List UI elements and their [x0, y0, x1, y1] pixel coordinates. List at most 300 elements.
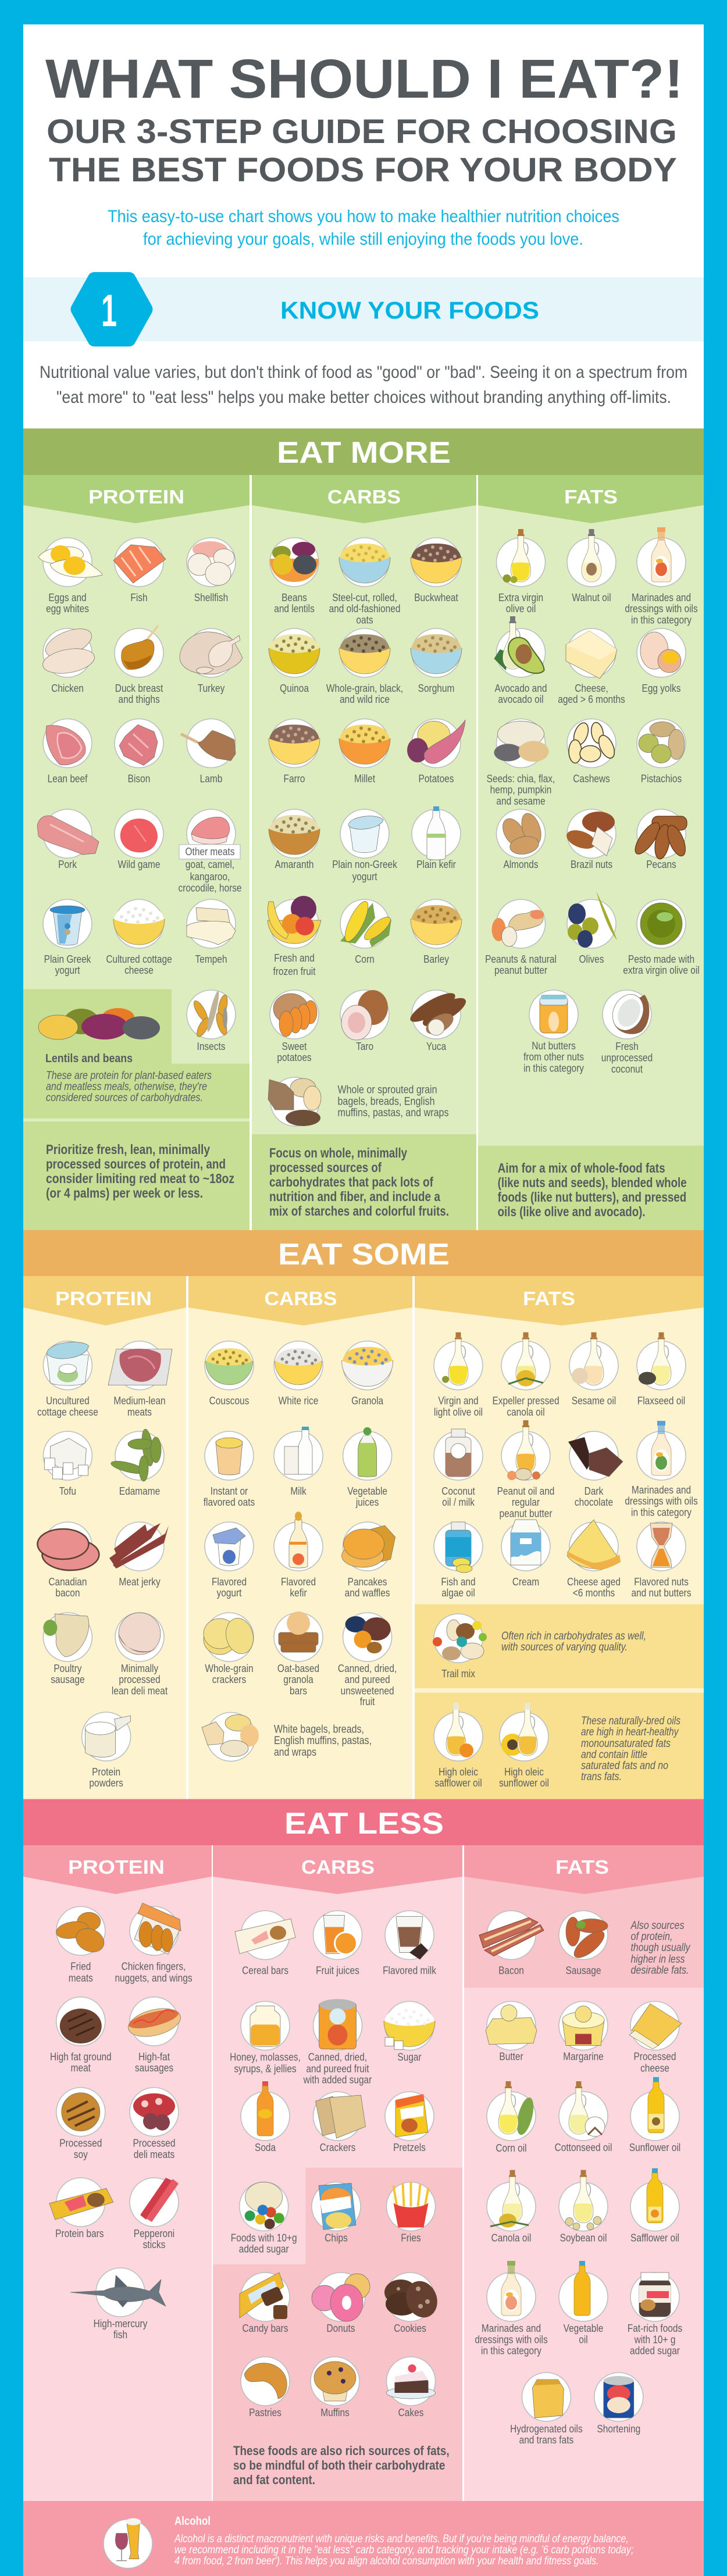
food: marinades	[475, 2261, 548, 2357]
food: high oleic sunflower oil: sunflower oil	[499, 1777, 549, 1789]
food: chicken	[41, 623, 97, 694]
food: turkey	[180, 628, 243, 694]
food: fat-rich foods	[628, 2273, 682, 2357]
food: lamb: Lamb	[200, 773, 222, 785]
food: canned fruit with sugar: Canned, dried,	[308, 2051, 367, 2063]
food: peanut oil: regular	[512, 1496, 540, 1509]
food: canned fruit with sugar: with added sugar	[303, 2074, 372, 2086]
icon: alcohol	[104, 2518, 152, 2568]
food: canned fruit with sugar	[303, 1999, 372, 2086]
food: sausage	[559, 1911, 608, 1977]
food: other meats: goat, camel,	[186, 859, 234, 870]
icon: step number hexagon: 1	[101, 285, 117, 336]
panel: alcohol	[23, 2501, 704, 2576]
food: plain greek yogurt: Plain Greek	[44, 953, 91, 965]
food: high oleic sunflower oil	[499, 1703, 549, 1789]
step description	[40, 363, 687, 407]
food: soda	[241, 2081, 290, 2153]
food: pancakes and waffles: Pancakes	[348, 1576, 387, 1588]
food: sunflower oil	[629, 2077, 680, 2153]
food: high fat ground meat: High fat ground	[50, 2051, 112, 2063]
food: canned fruit with sugar: and pureed fruit	[306, 2063, 369, 2075]
food: corn oil: Corn oil	[496, 2142, 527, 2154]
food: duck breast	[115, 626, 163, 706]
note: plant-based protein: and meatless meals, otherwise, they're	[46, 1081, 207, 1093]
food: lean beef: Lean beef	[48, 773, 88, 785]
food: pork: Pork	[58, 859, 77, 870]
panel: eat some fats	[415, 1276, 704, 1799]
food: white bagels: English muffins, pastas,	[274, 1735, 372, 1747]
food: pepperoni sticks: sticks	[143, 2239, 165, 2251]
note: protein advice	[23, 1121, 250, 1230]
note: protein advice: consider limiting red meat to ~18oz	[46, 1171, 234, 1186]
food: eggs	[38, 538, 102, 615]
header: protein	[23, 1845, 212, 1894]
panel: eat less carbs	[213, 1845, 462, 2502]
note: plant-based protein	[46, 1070, 212, 1104]
note: carbs rich in fats	[233, 2443, 450, 2487]
callout: other meats tag: Other meats	[185, 846, 235, 858]
food: flavored milk: Flavored milk	[383, 1964, 436, 1977]
food: vegetable juices	[343, 1427, 392, 1509]
food: marinades: dressings with oils	[625, 603, 698, 615]
food: instant oats: flavored oats	[204, 1496, 255, 1509]
food: crackers: Crackers	[320, 2142, 355, 2153]
food: oat-based granola bars	[274, 1612, 323, 1697]
food: crackers	[313, 2092, 365, 2153]
header: carbs	[213, 1845, 462, 1894]
food: chicken fingers: Chicken fingers,	[122, 1960, 186, 1973]
food: cashews: Cashews	[573, 773, 610, 785]
food: plain non-greek yogurt	[332, 809, 397, 883]
food: high-mercury fish	[70, 2268, 166, 2341]
food: trail mix: Trail mix	[441, 1668, 475, 1680]
food: pork	[37, 809, 99, 870]
food: pesto: extra virgin olive oil	[623, 964, 700, 977]
food: oat-based granola bars: granola	[283, 1674, 313, 1686]
header: carbs: CARBS	[264, 1288, 337, 1310]
food: fresh and frozen fruit: frozen fruit	[273, 966, 316, 977]
food: oats: and old-fashioned	[329, 603, 400, 615]
food: nut butters: from other nuts	[523, 1051, 584, 1063]
food: taro	[340, 990, 389, 1052]
food: white bagels	[202, 1713, 372, 1762]
food: amaranth	[269, 809, 320, 870]
header: fats	[464, 1845, 704, 1894]
food: high-fat sausages: High-fat	[138, 2051, 170, 2063]
food: chips	[312, 2182, 361, 2244]
food: pepperoni sticks	[130, 2178, 179, 2251]
food: high fat ground meat: meat	[71, 2062, 91, 2074]
food: whole-grain crackers: crackers	[212, 1674, 246, 1686]
food: processed cheese	[629, 2001, 682, 2074]
food: flaxseed oil: Flaxseed oil	[637, 1395, 685, 1407]
food: other meats: kangaroo,	[190, 871, 230, 883]
food: tofu	[43, 1431, 92, 1497]
food: vegetable oil	[559, 2261, 608, 2346]
food: sugar: Sugar	[397, 2051, 422, 2063]
food: peanuts: peanut butter	[494, 964, 547, 977]
food: vegetable juices: Vegetable	[347, 1485, 387, 1497]
note: trail mix	[501, 1630, 646, 1653]
note: carbs advice: mix of starches and colorful fruits.	[269, 1203, 449, 1219]
note: carbs advice: Focus on whole, minimally	[269, 1145, 407, 1160]
note: high oleic oils	[581, 1715, 680, 1783]
intro text: This easy-to-use chart shows you how to make healthier nutrition choices	[108, 207, 619, 226]
food: corn oil	[487, 2081, 537, 2154]
note: fatty meats: higher in less	[630, 1953, 685, 1966]
food: insects	[187, 990, 236, 1052]
food: coconut oil	[434, 1429, 483, 1509]
header: fats: FATS	[523, 1288, 575, 1310]
food: fresh coconut: unprocessed	[601, 1052, 653, 1064]
food: walnut oil: Walnut oil	[572, 592, 611, 603]
food: marinades: in this category	[631, 1506, 692, 1519]
food: millet: Millet	[354, 773, 375, 785]
food: marinades: dressings with oils	[475, 2334, 548, 2346]
food: tempeh: Tempeh	[195, 953, 227, 965]
food: canola oil: canola oil	[507, 1406, 545, 1418]
panel: eat some carbs	[188, 1276, 412, 1799]
food: whole-grain rice: and wild rice	[340, 694, 390, 706]
food: vegetable oil: oil	[579, 2334, 588, 2346]
food: other meats: crocodile, horse	[178, 882, 242, 894]
food: honey: syrups, & jellies	[234, 2063, 297, 2075]
food: processed deli meats	[130, 2088, 179, 2160]
food: turkey: Turkey	[198, 683, 225, 694]
note: protein advice: Prioritize fresh, lean, minimally	[46, 1142, 210, 1157]
note: fats advice	[478, 1146, 704, 1230]
food: vegetable oil: Vegetable	[564, 2323, 603, 2334]
food: uncultured cottage cheese: Uncultured	[46, 1395, 90, 1407]
panel: eat less fats	[464, 1845, 704, 2502]
food: margarine	[559, 2001, 608, 2063]
food: soybean oil	[559, 2170, 608, 2244]
food: fried meats	[55, 1906, 108, 1984]
food: cheese aged under 6 months: Cheese aged	[567, 1576, 621, 1588]
food: cheese aged under 6 months	[567, 1520, 621, 1599]
food: poultry sausage	[43, 1613, 92, 1686]
food: processed cheese: cheese	[640, 2062, 669, 2074]
note: high oleic oils: saturated fats and no	[581, 1760, 668, 1772]
header: fats	[415, 1276, 704, 1325]
food: eggs: Eggs and	[48, 592, 87, 603]
food: foods with added sugar	[231, 2182, 297, 2255]
panel: eat more fats	[478, 475, 704, 1230]
food: coconut oil: oil / milk	[442, 1496, 475, 1509]
food: nut butters: Nut butters	[532, 1040, 576, 1052]
food: cakes	[386, 2357, 435, 2418]
food: whole-grain crackers: Whole-grain	[205, 1663, 254, 1674]
food: quinoa: Quinoa	[280, 683, 309, 694]
header: carbs: CARBS	[327, 487, 401, 508]
food: pretzels: Pretzels	[393, 2142, 426, 2153]
food: sesame oil	[569, 1332, 618, 1407]
food: sunflower oil: Sunflower oil	[629, 2142, 680, 2153]
food: couscous	[205, 1341, 254, 1407]
food: plain kefir: Plain kefir	[416, 859, 456, 870]
food: oats: Steel-cut, rolled,	[332, 592, 397, 603]
food: safflower oil: Safflower oil	[630, 2232, 679, 2244]
food: high oleic safflower oil	[434, 1703, 483, 1789]
food: cashews	[567, 719, 618, 785]
food: extra virgin olive oil	[497, 529, 546, 615]
header: carbs	[252, 475, 476, 523]
icon: step number hexagon	[71, 272, 152, 346]
food: soybean oil: Soybean oil	[560, 2232, 607, 2244]
food: sesame oil: Sesame oil	[572, 1395, 616, 1407]
food: candy bars: Candy bars	[242, 2323, 288, 2334]
food: cheese aged: aged > 6 months	[558, 694, 625, 706]
header: fats: FATS	[564, 487, 618, 508]
note: carbs advice: carbohydrates that pack lots of	[269, 1174, 433, 1189]
note: fatty meats	[630, 1920, 691, 1977]
food: insects: Insects	[197, 1041, 225, 1052]
food: canned dried fruit: and pureed	[345, 1674, 390, 1686]
food: peanut oil: Peanut oil and	[497, 1485, 554, 1497]
food: fresh coconut: coconut	[611, 1063, 643, 1075]
food: cultured cottage cheese	[106, 899, 172, 977]
food: cream	[501, 1520, 550, 1588]
food: margarine: Margarine	[563, 2050, 604, 2063]
food: whole-grain rice	[326, 628, 403, 706]
food: nut butters	[523, 990, 584, 1074]
food: candy bars	[240, 2273, 290, 2334]
food: flavored nuts	[631, 1522, 692, 1599]
section: eat some	[23, 1230, 704, 1799]
food: beans and lentils: Beans	[281, 592, 307, 603]
food: whole or sprouted grain: Whole or sprouted grain	[337, 1084, 437, 1096]
food: fresh and frozen fruit	[268, 896, 321, 977]
food: marinades: in this category	[631, 614, 692, 626]
callout: fatty meats	[464, 1845, 704, 1988]
food: dark chocolate: Dark	[585, 1485, 603, 1497]
title	[45, 48, 683, 189]
food: white bagels: and wraps	[274, 1746, 316, 1759]
food: cookies: Cookies	[394, 2323, 426, 2334]
food: sweet potatoes: potatoes	[277, 1052, 312, 1064]
food: egg yolks: Egg yolks	[642, 683, 680, 694]
food: oats: oats	[356, 614, 373, 626]
food: canola oil: Canola oil	[491, 2232, 531, 2244]
food: sugar	[384, 2001, 435, 2063]
food: amaranth: Amaranth	[275, 859, 313, 870]
food: pesto	[623, 899, 700, 977]
food: walnut oil	[567, 529, 616, 603]
food: barley	[411, 899, 462, 965]
food: processed soy: Processed	[59, 2137, 102, 2149]
food: virgin and light olive oil: light olive oil	[434, 1406, 483, 1418]
food: yuca: Yuca	[426, 1041, 447, 1052]
note: fatty meats: of protein,	[630, 1931, 672, 1943]
food: farro	[269, 719, 320, 785]
food: shellfish	[187, 538, 236, 603]
note: carbs advice	[252, 1134, 476, 1230]
food: processed soy	[56, 2088, 105, 2160]
food: fresh coconut	[601, 989, 653, 1075]
note: high oleic oils: These naturally-bred oils	[581, 1715, 680, 1727]
food: pecans	[631, 809, 689, 870]
food: medium-lean meats: meats	[127, 1406, 152, 1418]
food: couscous: Couscous	[209, 1395, 249, 1407]
food: fish: Fish	[130, 592, 148, 603]
food: bison	[115, 719, 163, 785]
food: fish	[113, 538, 166, 603]
step 1 band	[23, 272, 704, 346]
step heading: KNOW YOUR FOODS	[280, 296, 539, 324]
food: donuts	[312, 2273, 370, 2334]
food: high oleic sunflower oil: High oleic	[504, 1766, 544, 1778]
food: protein powders: Protein	[92, 1766, 120, 1778]
food: pancakes and waffles: and waffles	[345, 1587, 390, 1599]
callout: other meats tag	[179, 845, 240, 859]
note: carbs rich in fats: and fat content.	[233, 2473, 315, 2487]
food: sweet potatoes	[270, 990, 319, 1064]
food: hydrogenated oils: Hydrogenated oils	[510, 2423, 583, 2435]
food: canned dried fruit: unsweetened	[341, 1685, 394, 1697]
food: farro: Farro	[284, 773, 305, 785]
food: canadian bacon: Canadian	[48, 1576, 87, 1588]
section: eat more	[23, 428, 704, 1230]
food: whole-grain rice: Whole-grain, black,	[326, 683, 403, 694]
food: marinades: dressings with oils	[625, 1495, 698, 1507]
food: protein bars	[49, 2178, 113, 2239]
note: high oleic oils: monounsaturated fats	[581, 1738, 671, 1750]
food: buckwheat: Buckwheat	[414, 592, 458, 603]
food: medium-lean meats	[108, 1341, 172, 1418]
section: eat less	[23, 1799, 704, 2576]
food: almonds	[497, 809, 546, 870]
food: fresh and frozen fruit: Fresh and	[274, 952, 315, 964]
food: protein bars: Protein bars	[55, 2228, 104, 2239]
food: extra virgin olive oil: Extra virgin	[498, 592, 543, 603]
food: plain non-greek yogurt: yogurt	[352, 871, 377, 883]
food: avocado: avocado oil	[498, 694, 544, 706]
heading: eat less: EAT LESS	[284, 1807, 444, 1841]
food: flavored milk	[383, 1911, 436, 1977]
note: fats advice: (like nuts and seeds), blended whole	[498, 1175, 687, 1190]
food: marinades: Marinades and	[632, 592, 691, 603]
food: cookies	[384, 2273, 442, 2334]
note: protein advice: (or 4 palms) per week or less.	[46, 1185, 203, 1201]
icon: lentils heap	[38, 1008, 160, 1039]
food: fried meats: Fried	[70, 1960, 91, 1973]
food: chips: Chips	[325, 2232, 348, 2244]
food: processed deli meats: deli meats	[134, 2149, 174, 2160]
food: donuts: Donuts	[327, 2323, 355, 2334]
food: pesto: Pesto made with	[628, 953, 694, 965]
food: wild game: Wild game	[118, 859, 160, 870]
food: white rice	[274, 1341, 323, 1407]
food: fresh coconut: Fresh	[615, 1041, 639, 1052]
food: canola oil	[492, 1332, 559, 1418]
food: cereal bars: Cereal bars	[242, 1964, 288, 1977]
food: canned dried fruit: Canned, dried,	[338, 1663, 397, 1674]
food: foods with added sugar: added sugar	[239, 2243, 289, 2255]
food: whole or sprouted grain: muffins, pastas, and wraps	[337, 1107, 449, 1119]
callout: high oleic oils	[415, 1693, 704, 1799]
food: cottonseed oil	[555, 2081, 612, 2153]
food: pepperoni sticks: Pepperoni	[134, 2228, 174, 2239]
food: extra virgin olive oil: olive oil	[506, 603, 536, 615]
food: beans and lentils: and lentils	[274, 603, 315, 615]
food: almonds: Almonds	[503, 859, 539, 870]
food: milk: Milk	[290, 1485, 307, 1497]
food: oat-based granola bars: Oat-based	[277, 1663, 319, 1674]
note: alcohol: Alcohol is a distinct macronutrient with unique risks and benefits. But if you're being mindful of energy balance,	[174, 2533, 629, 2545]
note: fats advice: Aim for a mix of whole-food fats	[498, 1160, 665, 1176]
food: sorghum: Sorghum	[418, 683, 454, 694]
food: poultry sausage: sausage	[51, 1674, 85, 1686]
note: protein advice: processed sources of protein, and	[46, 1156, 226, 1171]
food: protein powders: powders	[89, 1777, 123, 1789]
food: lean deli meat	[112, 1613, 168, 1697]
food: butter: Butter	[499, 2050, 523, 2063]
food: corn: Corn	[355, 953, 375, 965]
food: cereal bars	[235, 1911, 295, 1977]
note: plant-based protein: considered sources of carbohydrates.	[46, 1092, 203, 1104]
food: cheese aged	[558, 628, 625, 706]
food: plain greek yogurt	[43, 899, 92, 977]
note: high oleic oils: and contain little	[581, 1749, 647, 1761]
food: peanuts: Peanuts & natural	[485, 953, 557, 965]
note: fatty meats: Also sources	[630, 1920, 685, 1932]
food: tempeh	[187, 899, 236, 965]
food: chicken fingers: nuggets, and wings	[115, 1972, 193, 1984]
food: uncultured cottage cheese: cottage cheese	[37, 1406, 98, 1418]
food: canola oil	[487, 2170, 536, 2244]
food: flavored kefir: Flavored	[281, 1576, 316, 1588]
note: fatty meats: though usually	[630, 1942, 691, 1954]
callout: trail mix	[415, 1604, 704, 1688]
food: fat-rich foods: added sugar	[630, 2345, 680, 2357]
food: cream: Cream	[512, 1576, 539, 1588]
food: shortening: Shortening	[597, 2423, 640, 2435]
food: pastries: Pastries	[249, 2407, 281, 2418]
food: canned dried fruit	[338, 1613, 397, 1707]
food: whole or sprouted grain: bagels, breads, English	[337, 1095, 435, 1108]
note: high oleic oils: are high in heart-healthy	[581, 1726, 679, 1738]
food: pistachios: Pistachios	[641, 773, 682, 785]
food: sorghum	[411, 628, 462, 694]
food: cottonseed oil: Cottonseed oil	[555, 2142, 612, 2153]
header: protein: PROTEIN	[55, 1288, 152, 1310]
food: hydrogenated oils: and trans fats	[519, 2434, 573, 2446]
food: cakes: Cakes	[398, 2407, 423, 2418]
food: high-fat sausages: sausages	[135, 2062, 173, 2074]
food: seeds	[487, 719, 555, 807]
food: oats	[329, 538, 400, 626]
food: yuca	[407, 988, 469, 1052]
food: beans and lentils	[270, 538, 319, 615]
food: virgin and light olive oil: Virgin and	[438, 1395, 479, 1407]
food: fish and algae oil	[434, 1522, 483, 1599]
food: lamb	[181, 719, 236, 785]
header: protein	[23, 475, 250, 523]
food: potatoes	[407, 719, 465, 785]
food: corn	[340, 899, 394, 965]
food: pastries	[241, 2357, 290, 2418]
panel: eat more carbs	[252, 475, 476, 1230]
food: vegetable juices: juices	[355, 1496, 379, 1509]
note: alcohol: we recommend including it in the "eat less" carb category, and tracking your intake (e.g. '6 carb portions today;	[174, 2544, 634, 2556]
food: white rice: White rice	[279, 1395, 318, 1407]
note: carbs advice: processed sources of	[269, 1160, 382, 1175]
food: lean beef	[43, 719, 92, 785]
food: cheese aged under 6 months: <6 months	[573, 1587, 615, 1599]
food: edamame: Edamame	[119, 1485, 160, 1497]
food: virgin and light olive oil	[434, 1332, 483, 1418]
